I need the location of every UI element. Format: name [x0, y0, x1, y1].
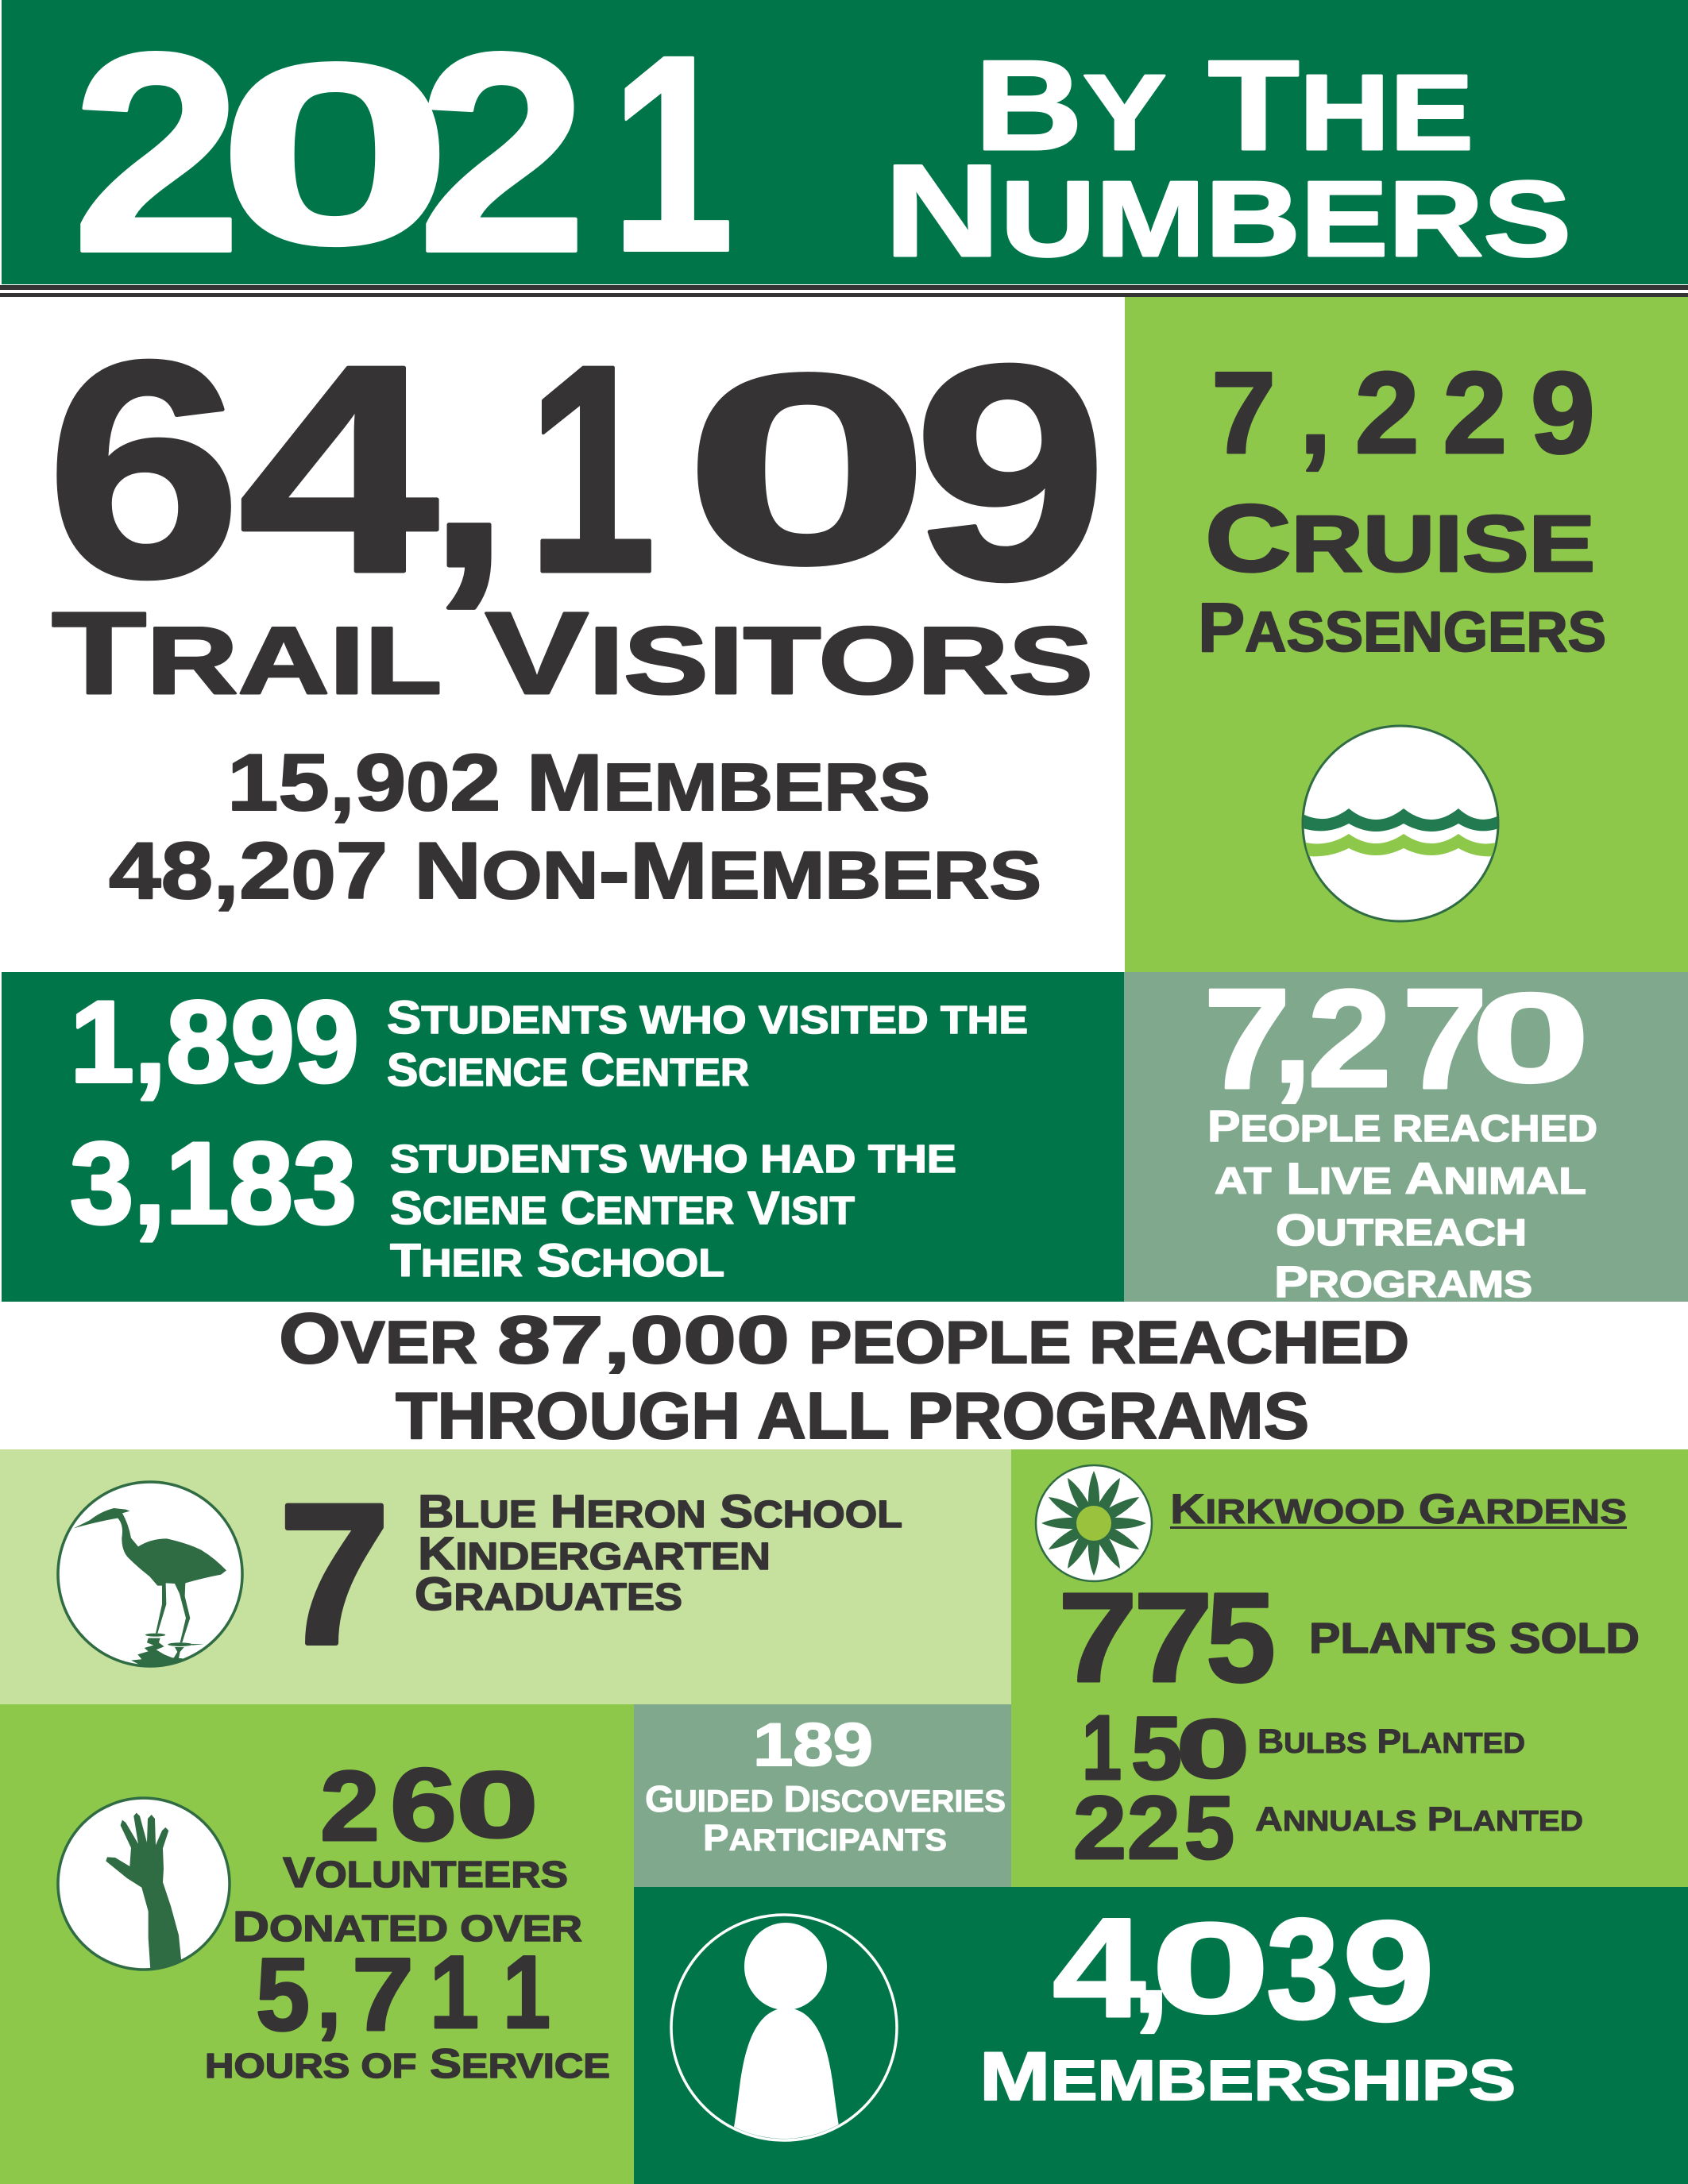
icon: water waves [1303, 726, 1499, 921]
panel: over 87,000 people reached: 87,000 [497, 1302, 790, 1377]
number: 4,039: 4 [1053, 1889, 1145, 2047]
number: 5,711: 1 [430, 1934, 479, 2050]
label: memberships: MEMBERSHIPS [979, 2039, 1516, 2115]
label: people reached [1207, 1101, 1597, 1306]
number: 4,039: 3 [1266, 1889, 1339, 2049]
panel: over 87,000 people reached: OVER [279, 1299, 463, 1379]
label: students visited at school: THEIR SCHOOL [390, 1235, 724, 1287]
label: plants sold: PLANTS SOLD [1309, 1615, 1640, 1662]
number: 5,711: , [317, 1948, 341, 2046]
number: 775: 7 [1058, 1566, 1138, 1708]
title: By The Numbers: BY THE [975, 34, 1474, 177]
number: 260: 2 [320, 1751, 380, 1862]
panel: cruise passengers [1125, 297, 1688, 972]
big number: 64,109: 1 [527, 303, 656, 634]
number: 7,270: 0 [1471, 967, 1590, 1109]
panel: live animal outreach [1124, 959, 1688, 1306]
label: volunteers: VOLUNTEERS [283, 1849, 568, 1897]
number: 5,711: 5 [256, 1936, 310, 2052]
icon: heron [58, 1482, 242, 1666]
label: kindergarten graduates: KINDERGARTEN [418, 1528, 771, 1580]
number: 3,183: 3,183 [70, 1118, 357, 1248]
number: 225: 5 [1184, 1778, 1234, 1877]
number: 1,899: 1,899 [70, 977, 359, 1106]
header banner [0, 0, 1688, 311]
label: donated over: DONATED OVER [233, 1903, 582, 1951]
label: passengers: PASSENGERS [1198, 589, 1606, 666]
number: 7,270: 2 [1308, 962, 1392, 1117]
title: By The Numbers [884, 34, 1571, 284]
big number: 64,109: 4 [238, 303, 441, 634]
label: cruise: CRUISE [1205, 485, 1595, 592]
number: 150: 5 [1131, 1699, 1182, 1798]
label: annuals planted: ANNUALS PLANTED [1255, 1800, 1583, 1839]
label: students visited at school: SCIENE CENTER VISIT [390, 1183, 855, 1234]
number: 4,039: 0 [1151, 1897, 1270, 2040]
label: trail visitors: TRAIL V ISITORS [52, 588, 1093, 719]
label: guided discoveries participants: PARTICIPANTS [703, 1817, 947, 1858]
label: people reached: AT LIVE ANIMAL [1215, 1153, 1586, 1203]
icon: raised hand [58, 1798, 230, 1970]
title: 2021: 2 [417, 0, 588, 311]
number: 7,270: , [1273, 959, 1311, 1111]
label: people reached: PEOPLE REACHED [1207, 1101, 1597, 1151]
label: kindergarten graduates [415, 1486, 902, 1620]
number: 5,711: 7 [352, 1936, 414, 2052]
number: 150: 1 [1082, 1697, 1122, 1799]
big number: 64,109: 0 [683, 318, 931, 620]
heading: kirkwood gardens: KIRKWOOD GARDENS [1170, 1486, 1627, 1533]
number: 225: 2 [1127, 1778, 1180, 1877]
label: students who visited [387, 992, 1028, 1096]
label: students visited at school [390, 1138, 956, 1287]
number: 7: 7 [279, 1463, 390, 1686]
title: 2021: 2 [71, 0, 242, 311]
number: 189: 189 [753, 1711, 873, 1779]
big number: 64,109: , [429, 318, 508, 624]
label: people reached: OUTREACH [1276, 1205, 1527, 1255]
big number: 64,109: 9 [914, 301, 1107, 643]
title: 2021: 0 [216, 10, 454, 298]
panel: memberships [634, 1887, 1688, 2184]
number: 225: 2 [1073, 1778, 1126, 1877]
label: guided discoveries participants: GUIDED DISCOVERIES [645, 1778, 1006, 1819]
panel: kirkwood gardens [1011, 1449, 1688, 1887]
panel: trail visitors [0, 297, 1125, 972]
label: kindergarten graduates: BLUE HERON SCHOOL [418, 1486, 902, 1538]
label: students who visited: SCIENCE CENTER [387, 1044, 749, 1096]
icon: person [671, 1915, 897, 2144]
panel: guided discoveries [634, 1704, 1011, 1887]
number: 150: 0 [1176, 1703, 1250, 1796]
label: students visited at school: STUDENTS WHO HAD THE [390, 1138, 956, 1181]
members count: 15,9 02 M EMBERS [227, 739, 930, 828]
icon: flower [1036, 1465, 1152, 1581]
label: bulbs planted: BULBS PLANTED [1257, 1723, 1525, 1761]
panel: blue heron school [0, 1449, 1011, 1704]
panel: students [2, 972, 1124, 1302]
label: students who visited: STUDENTS WHO VISITED THE [387, 992, 1028, 1044]
number: 5,711: 1 [503, 1934, 550, 2050]
number: 775: 7 [1134, 1566, 1213, 1708]
number: 4,039: 9 [1342, 1892, 1435, 2051]
label: hours of service: HOURS OF SERVICE [205, 2041, 610, 2087]
number: 260: 6 [390, 1746, 457, 1862]
title: 2021: 1 [611, 0, 734, 310]
panel: over 87,000 people reached: THROUGH ALL PROGRAMS [396, 1379, 1309, 1453]
label: kindergarten graduates: GRADUATES [415, 1569, 682, 1620]
number: 7,270: 7 [1203, 959, 1291, 1119]
big number: 64,109: 6 [46, 298, 241, 642]
number: 7,229: 7,229 [1211, 348, 1595, 477]
non-members count: 48,2 07 N ON-MEMBERS [109, 827, 1041, 916]
number: 775: 5 [1206, 1566, 1276, 1708]
panel: over 87,000 people reached [0, 1299, 1688, 1453]
number: 7,270: 7 [1402, 959, 1488, 1119]
panel: volunteers [0, 1704, 634, 2184]
title: By The Numbers: NUMBERS [884, 137, 1571, 284]
panel: over 87,000 people reached: PEOPLE REACHED [809, 1309, 1409, 1376]
number: 4,039: , [1132, 1889, 1170, 2041]
number: 260: 0 [456, 1753, 539, 1858]
label: guided discoveries participants [645, 1778, 1006, 1858]
label: people reached: PROGRAMS [1274, 1256, 1532, 1306]
